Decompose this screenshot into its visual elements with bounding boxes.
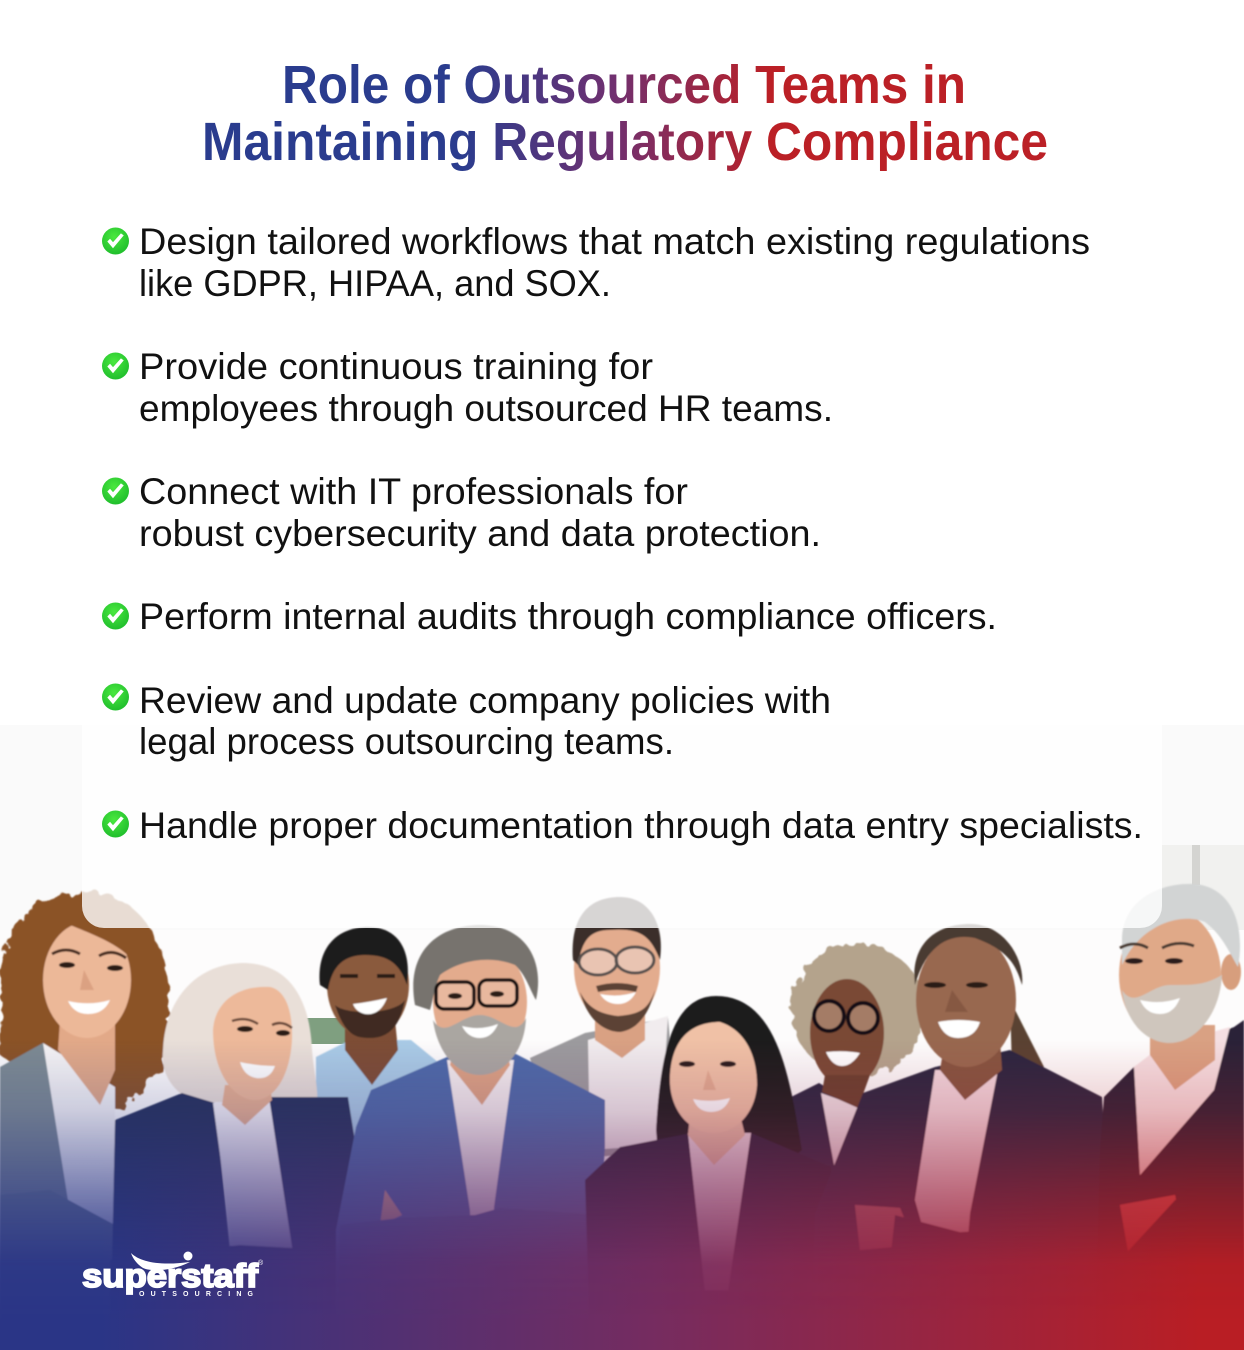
logo: SuperStaff Outsourcing xyxy=(82,1252,264,1298)
gradient overlay blue to red xyxy=(0,1053,1244,1350)
photo background xyxy=(0,725,1244,1350)
title: Maintaining Regulatory Compliance xyxy=(202,112,1048,172)
person: laughing woman with braids, dark blazer xyxy=(810,924,1105,1350)
list item 4: Perform internal audits through compliance officers. xyxy=(139,596,997,637)
logo: SuperStaff Outsourcing: superstaff xyxy=(82,1257,259,1294)
icon: green check xyxy=(102,810,129,838)
list item 5 xyxy=(102,680,831,762)
icon: green check xyxy=(102,228,129,254)
arm: gray sleeve crossed xyxy=(0,1190,125,1350)
person: woman with long black hair, dark blazer xyxy=(585,996,840,1350)
people xyxy=(0,884,1244,1350)
photo: team of smiling professionals xyxy=(0,845,1244,1350)
person: woman with curly blond afro and round glasses xyxy=(785,944,925,1300)
person: man with silver hair and beard, dark blazer xyxy=(1095,884,1244,1350)
list item 3: robust cybersecurity and data protection. xyxy=(139,513,821,554)
list item 3: Connect with IT professionals for xyxy=(139,471,688,512)
icon: green check xyxy=(102,684,129,710)
list item 1: Design tailored workflows that match existing regulations xyxy=(139,221,1090,262)
list item 2 xyxy=(102,346,833,429)
list item 3 xyxy=(102,471,821,554)
logo: SuperStaff Outsourcing: OUTSOURCING xyxy=(139,1291,254,1298)
arm: blue sleeve and hand crossed xyxy=(336,1190,600,1350)
list item 1 xyxy=(102,221,1090,304)
icon: green check xyxy=(102,602,129,630)
arm: dark sleeve and fist crossed xyxy=(1110,1170,1244,1350)
person: bearded man with glasses, blue blazer xyxy=(336,925,605,1350)
title xyxy=(202,55,1048,172)
list item 5: legal process outsourcing teams. xyxy=(139,721,674,762)
icon: green check xyxy=(102,352,129,380)
list item 2: employees through outsourced HR teams. xyxy=(139,388,833,429)
title: Role of Outsourced Teams in xyxy=(282,55,966,115)
person: blonde woman, navy blazer xyxy=(110,963,356,1350)
list item 2: Provide continuous training for xyxy=(139,346,653,387)
icon: green check xyxy=(102,478,129,504)
translucent white text panel xyxy=(82,725,1162,928)
person: man with glasses, gray blazer xyxy=(530,897,680,1160)
logo: SuperStaff Outsourcing: ® xyxy=(258,1259,264,1267)
arm: navy sleeve crossed xyxy=(110,1245,345,1350)
list item 6: Handle proper documentation through data entry specialists. xyxy=(139,805,1143,846)
list item 1: like GDPR, HIPAA, and SOX. xyxy=(139,263,611,304)
person: woman with curly auburn hair, gray blazer xyxy=(0,892,169,1350)
person: man in blue shirt, back row xyxy=(316,927,445,1140)
arm: dark sleeve and fist crossed xyxy=(855,1205,1095,1350)
list item 5: Review and update company policies with xyxy=(139,680,831,721)
